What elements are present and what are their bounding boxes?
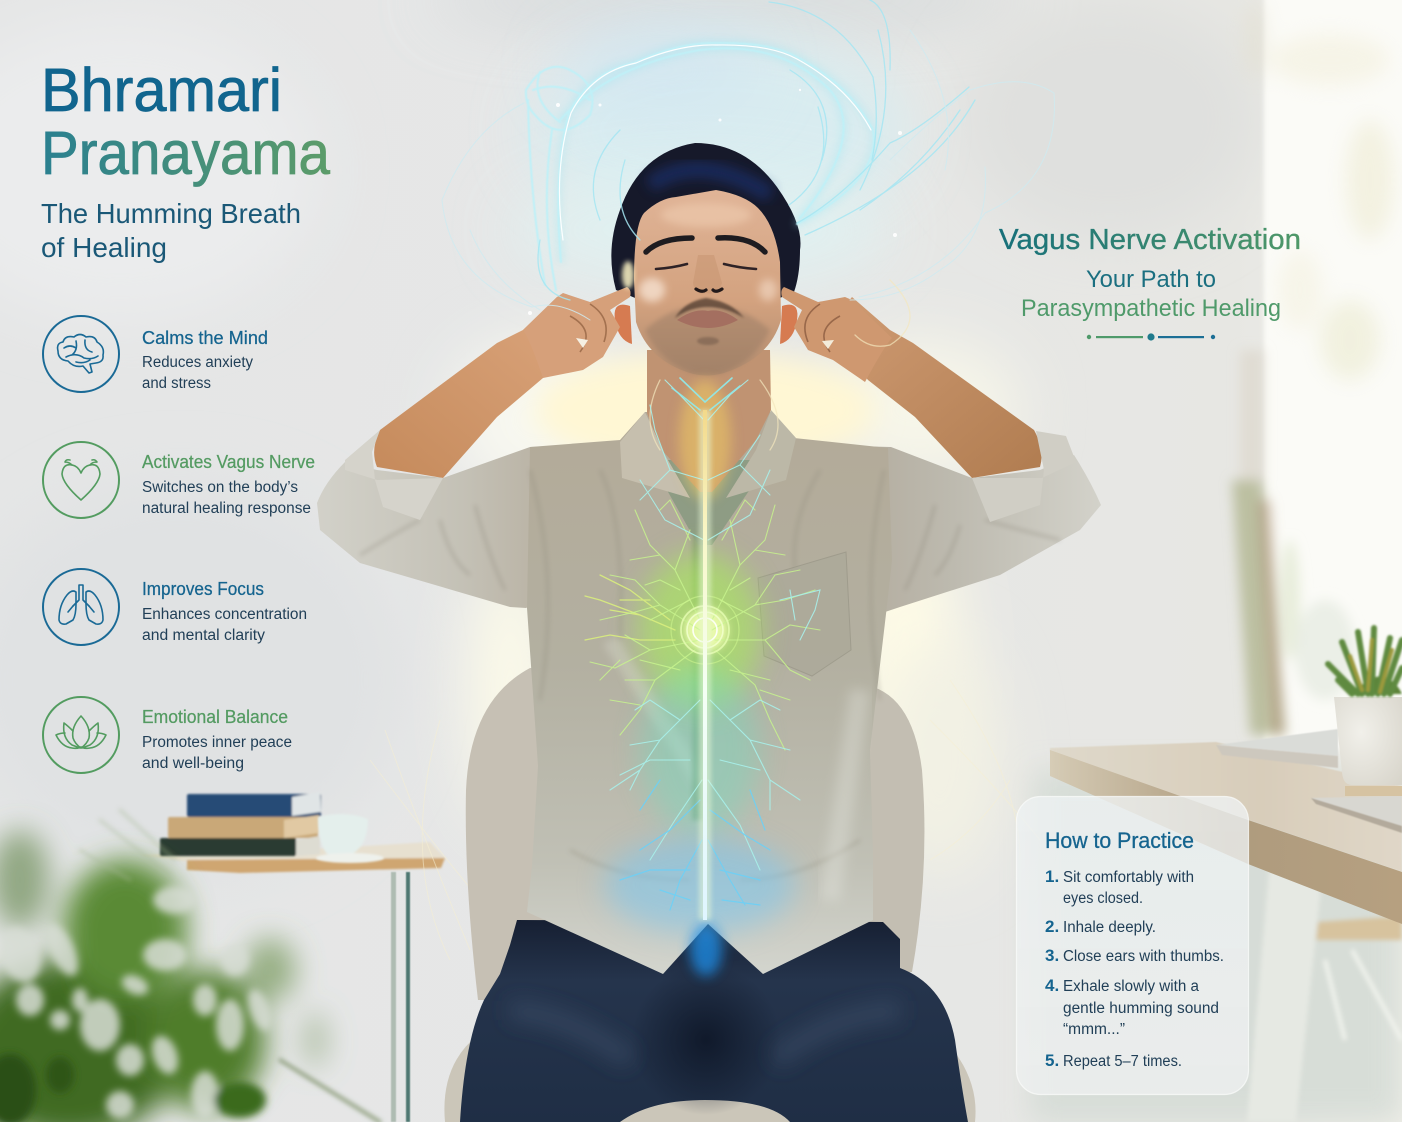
sleeve folds <box>360 505 1060 590</box>
step 1: Sit comfortably with <box>1063 869 1194 886</box>
trousers <box>460 920 968 1122</box>
step 4 <box>1045 976 1219 1038</box>
description <box>142 606 307 644</box>
subtitle: of Healing <box>41 232 167 263</box>
right desk with plant, laptop and tablet <box>1050 628 1402 1122</box>
heading: Vagus Nerve Activation <box>999 224 1301 256</box>
description: and well-being <box>142 755 244 772</box>
warm strands near ears <box>650 280 910 450</box>
central nerve line <box>699 410 711 920</box>
swirl glow <box>558 43 874 260</box>
button placket shadow <box>692 500 704 820</box>
right sleeve <box>805 445 1101 612</box>
desk leg <box>1247 860 1402 1122</box>
desk edge <box>1050 750 1402 924</box>
main bright strands <box>526 43 874 290</box>
step 3: 3. <box>1045 946 1059 965</box>
right hand <box>781 287 892 382</box>
plant pot <box>1334 697 1402 785</box>
benefit: calms the mind <box>43 316 268 392</box>
aura glow behind figure <box>370 20 1040 960</box>
crotch shadow <box>631 965 781 1115</box>
left hand <box>523 287 631 378</box>
description: Switches on the body’s <box>142 479 298 496</box>
branches: blue <box>620 780 770 910</box>
lower light trails <box>370 680 1040 960</box>
description: Reduces anxiety <box>142 354 253 371</box>
subheading: Your Path to <box>1086 266 1216 293</box>
step 3: Close ears with thumbs. <box>1063 948 1224 965</box>
neck <box>647 350 771 492</box>
fronds and branch <box>80 810 380 1122</box>
gap between fingers <box>822 340 834 349</box>
title: Pranayama: Pranayama <box>41 119 330 187</box>
icon: heart <box>43 442 119 518</box>
branches: cyan <box>610 380 820 870</box>
left forearm <box>374 297 590 478</box>
left ear <box>615 305 632 344</box>
left cuff fold <box>345 430 443 520</box>
heading: Activates Vagus Nerve <box>142 452 315 472</box>
heading: Calms the Mind <box>142 328 268 348</box>
collar left <box>620 412 690 498</box>
table legs <box>391 872 410 1122</box>
gap between fingers <box>576 338 588 348</box>
heading: Improves Focus <box>142 579 264 599</box>
moustache <box>675 298 744 318</box>
step 2: 2. <box>1045 917 1059 936</box>
faint outer strands <box>442 30 1054 320</box>
blurred foreground plant <box>0 810 380 1122</box>
figure: man meditating <box>317 143 1101 1122</box>
heading: Emotional Balance <box>142 707 288 727</box>
right cuff fold <box>972 431 1076 522</box>
left side table with books and cup <box>140 792 445 1122</box>
ornament divider <box>1087 333 1215 341</box>
step 2: Inhale deeply. <box>1063 919 1156 936</box>
vagus nerve heading block <box>999 224 1301 341</box>
energy swirl above head <box>442 0 1054 450</box>
panel background <box>1016 796 1248 1094</box>
step 5: Repeat 5–7 times. <box>1063 1053 1182 1070</box>
hair <box>611 143 801 300</box>
shirt opening <box>650 460 770 545</box>
benefit: emotional balance <box>43 697 292 773</box>
step 4: Exhale slowly with a <box>1063 978 1199 995</box>
branches: green <box>590 500 820 750</box>
cheek highlights <box>639 203 777 302</box>
tea cup <box>316 814 384 863</box>
heart rings <box>671 596 739 664</box>
closed eyes <box>656 264 756 269</box>
sparkles <box>528 89 902 315</box>
subtitle: The Humming Breath <box>41 198 301 229</box>
shirt pocket <box>758 552 851 676</box>
table top <box>140 842 445 873</box>
title: Bhramari: Bhramari <box>41 56 282 124</box>
left sleeve <box>317 445 606 608</box>
description: and stress <box>142 375 211 392</box>
panel heading: How to Practice <box>1045 828 1194 853</box>
shirt shading folds <box>530 470 884 880</box>
description <box>142 479 311 517</box>
shirt highlight streak <box>610 640 700 780</box>
right forearm <box>825 297 1042 478</box>
nose <box>693 255 722 294</box>
subtitle <box>41 198 301 263</box>
chair <box>444 668 976 1122</box>
trouser highlights <box>510 1010 900 1060</box>
books <box>160 792 321 856</box>
chin patch <box>697 337 719 345</box>
benefit: improves focus <box>43 569 307 645</box>
vagus nerve network <box>585 378 820 976</box>
hair side flare <box>622 261 634 289</box>
step 5: 5. <box>1045 1051 1059 1070</box>
secondary strands <box>538 0 975 300</box>
step 1: eyes closed. <box>1063 890 1143 907</box>
desk surface <box>1050 742 1402 872</box>
brainstem branches <box>672 378 740 410</box>
shirt hem sparkle <box>703 890 709 926</box>
description <box>142 734 292 772</box>
icon: lotus <box>43 697 119 773</box>
icon: lungs <box>43 569 119 645</box>
branches: yellow green <box>585 575 675 640</box>
description: Promotes inner peace <box>142 734 292 751</box>
description: and mental clarity <box>142 627 265 644</box>
collar right <box>726 410 796 498</box>
hair sheen <box>650 170 770 195</box>
description: natural healing response <box>142 500 311 517</box>
potted plant <box>1328 628 1402 694</box>
eyebrows <box>646 238 765 252</box>
right ear <box>780 305 797 344</box>
icon: brain <box>43 316 119 392</box>
chest glow <box>605 380 795 976</box>
description <box>142 354 253 392</box>
lips <box>677 310 738 328</box>
step 4: gentle humming sound <box>1063 1000 1219 1017</box>
shirt torso <box>527 412 892 974</box>
window tree trunk <box>1232 350 1355 735</box>
step 4: “mmm...” <box>1063 1021 1125 1038</box>
tablet <box>1311 796 1402 833</box>
beard stubble <box>645 305 770 375</box>
panel: how to practice <box>1016 796 1248 1094</box>
step 1: 1. <box>1045 867 1059 886</box>
subheading accent: Parasympathetic Healing <box>1021 295 1281 322</box>
laptop <box>1216 729 1338 768</box>
description: Enhances concentration <box>142 606 307 623</box>
step 1 <box>1045 867 1194 907</box>
face <box>634 190 781 376</box>
benefit: activates vagus nerve <box>43 442 315 518</box>
step 4: 4. <box>1045 976 1059 995</box>
saucer under pot <box>1345 786 1402 796</box>
title block <box>41 56 330 263</box>
